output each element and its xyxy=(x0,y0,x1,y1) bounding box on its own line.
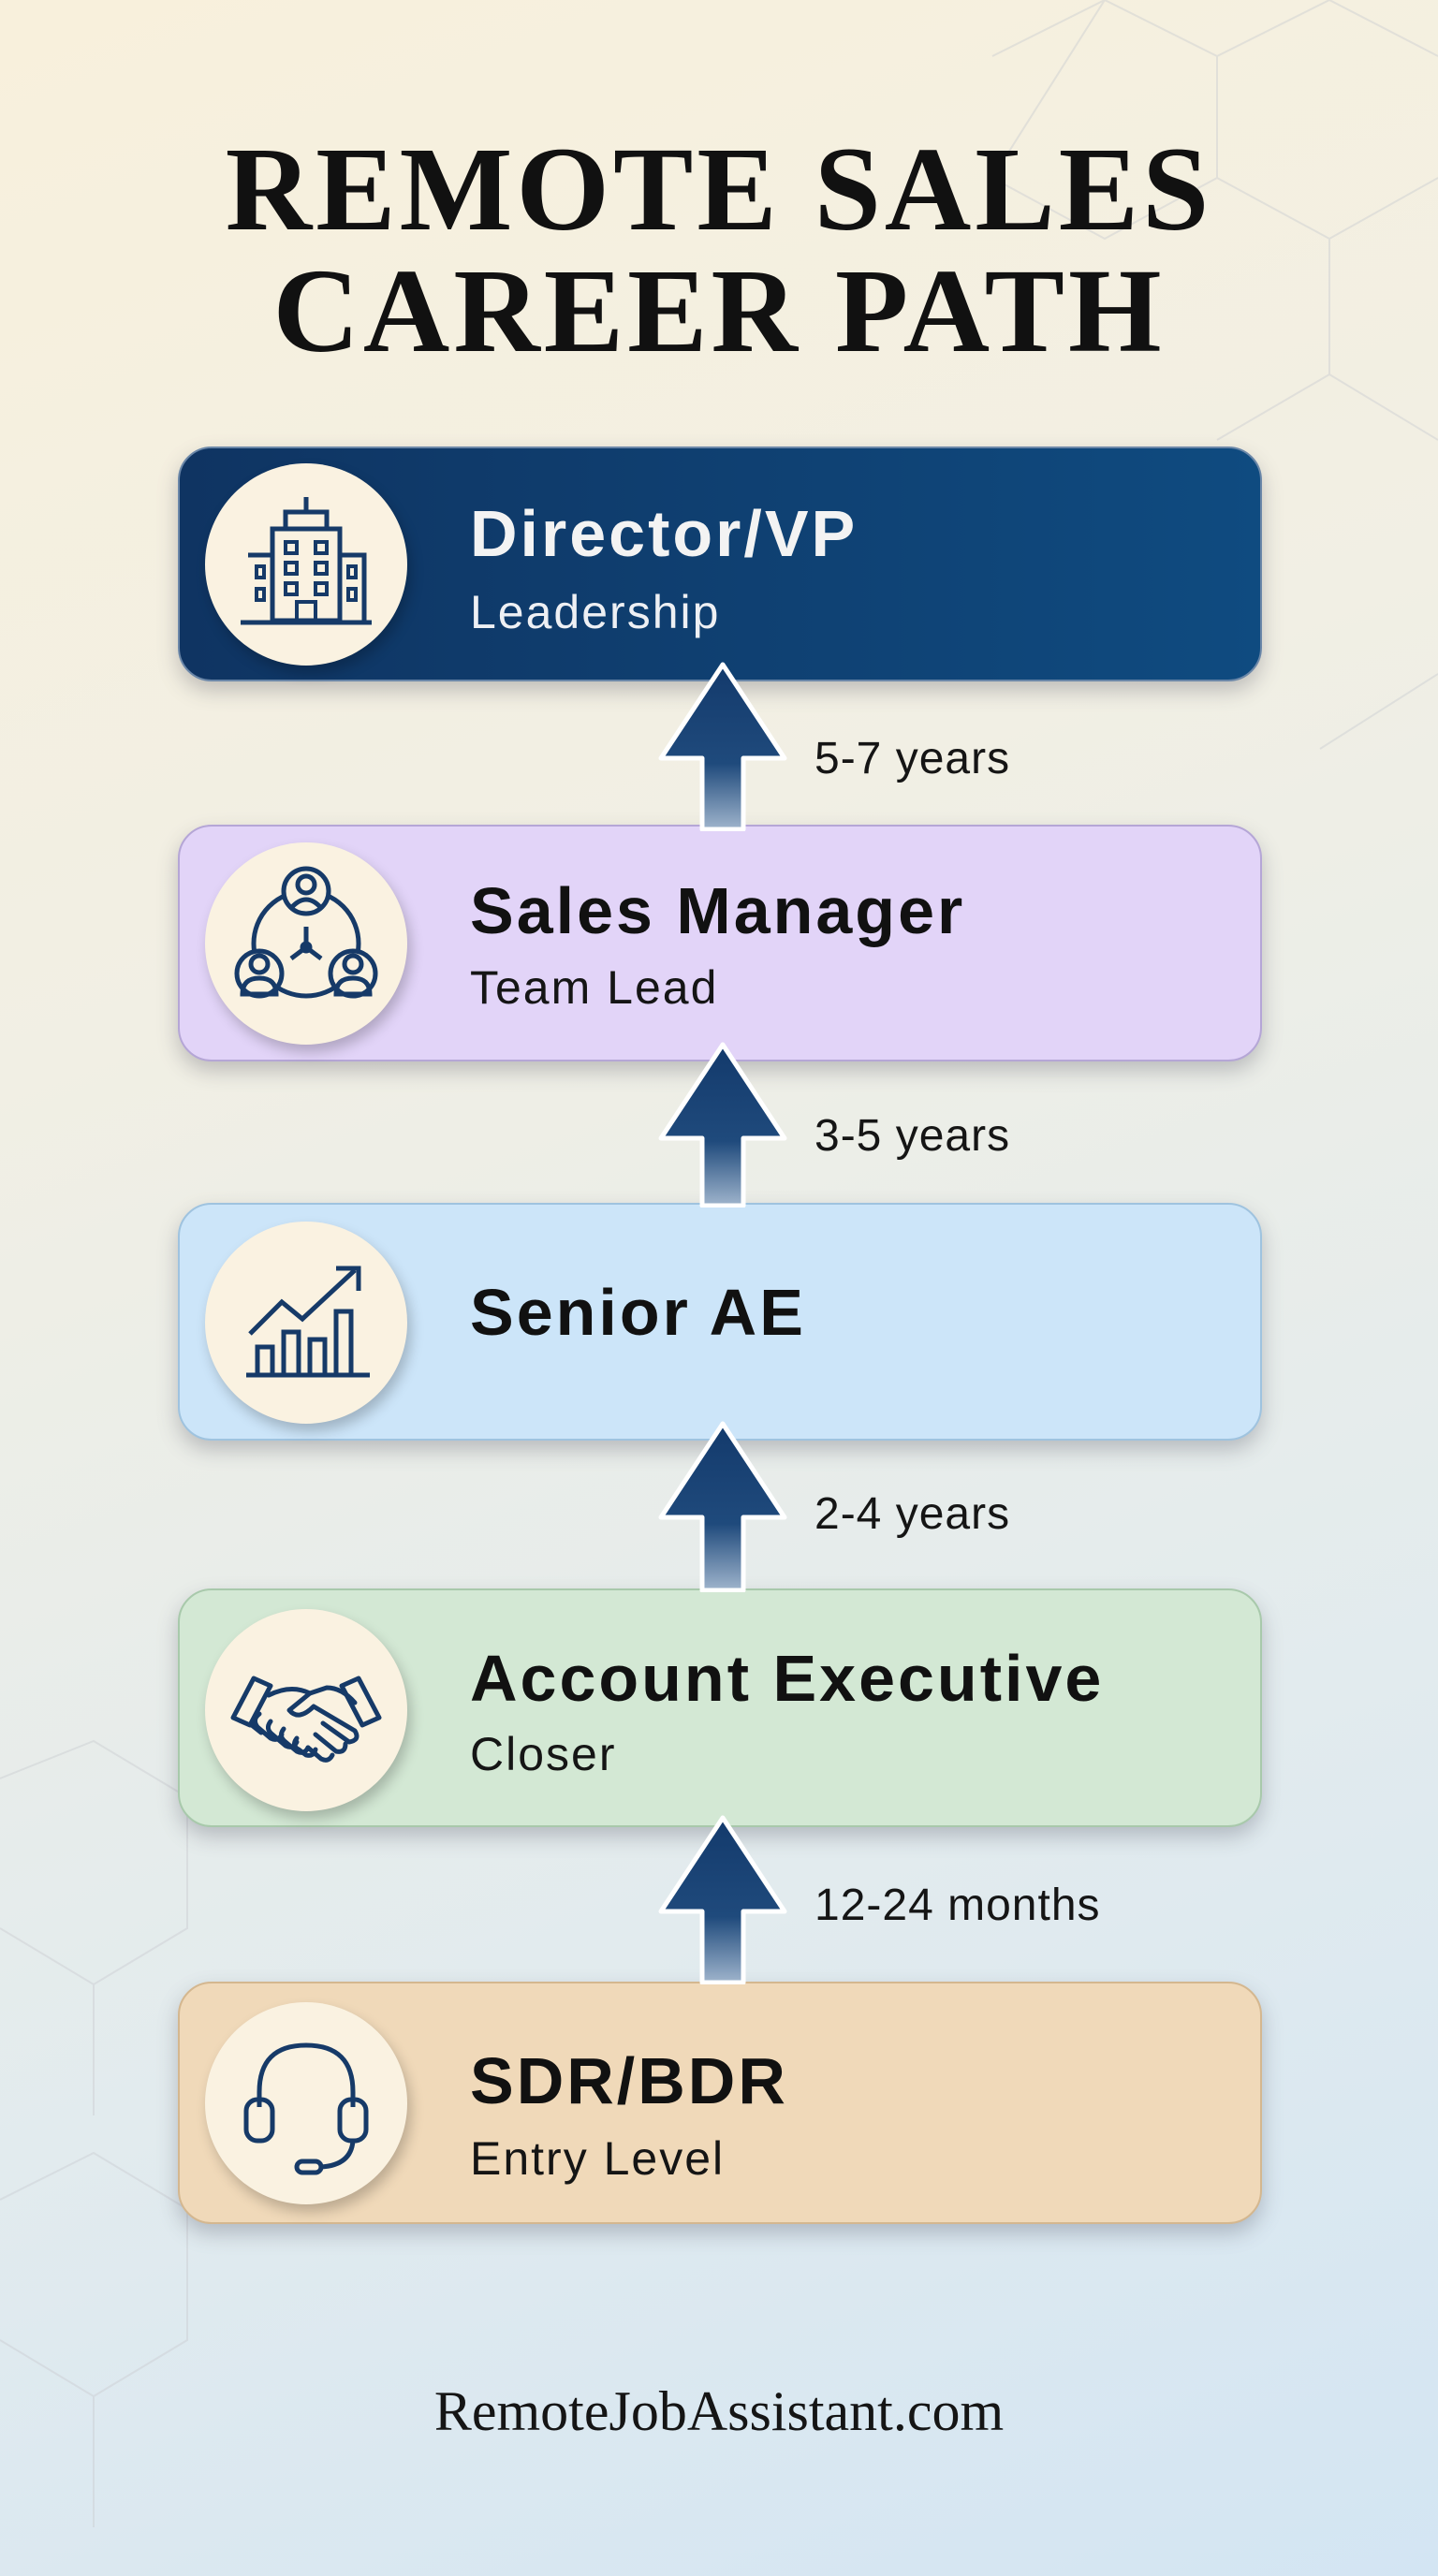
icon: headset xyxy=(205,2002,407,2204)
icon: building xyxy=(205,463,407,666)
icon: handshake xyxy=(205,1609,407,1811)
label: 3-5 years: 3-5 years xyxy=(814,1111,1010,1161)
heading: Sales Manager xyxy=(470,874,965,947)
subtitle: Entry Level xyxy=(470,2132,725,2185)
arrow: to Senior AE xyxy=(659,1421,786,1592)
heading: Director/VP xyxy=(470,497,858,570)
title xyxy=(226,123,1212,377)
heading: SDR/BDR xyxy=(470,2044,788,2117)
arrow: to Sales Manager xyxy=(659,1043,786,1208)
title: REMOTE SALES xyxy=(226,123,1212,256)
panel: Sales Manager xyxy=(178,825,1262,1061)
subtitle: Leadership xyxy=(470,586,720,638)
heading: Account Executive xyxy=(470,1642,1104,1715)
panel: SDR/BDR xyxy=(178,1982,1262,2224)
label: 5-7 years: 5-7 years xyxy=(814,734,1010,783)
subtitle: Team Lead xyxy=(470,961,718,1014)
label: 12-24 months: 12-24 months xyxy=(814,1881,1101,1930)
arrow: to Account Executive xyxy=(659,1816,786,1984)
arrow: to Director/VP xyxy=(659,663,786,831)
icon: team xyxy=(205,842,407,1045)
footer: RemoteJobAssistant.com xyxy=(434,2380,1004,2442)
label: 2-4 years: 2-4 years xyxy=(814,1489,1010,1539)
heading: Senior AE xyxy=(470,1276,806,1349)
subtitle: Closer xyxy=(470,1728,616,1780)
panel: Account Executive xyxy=(178,1588,1262,1827)
icon: growth chart xyxy=(205,1222,407,1424)
panel: Director/VP xyxy=(178,446,1262,681)
panel: Senior AE xyxy=(178,1203,1262,1441)
title: CAREER PATH xyxy=(272,244,1166,377)
